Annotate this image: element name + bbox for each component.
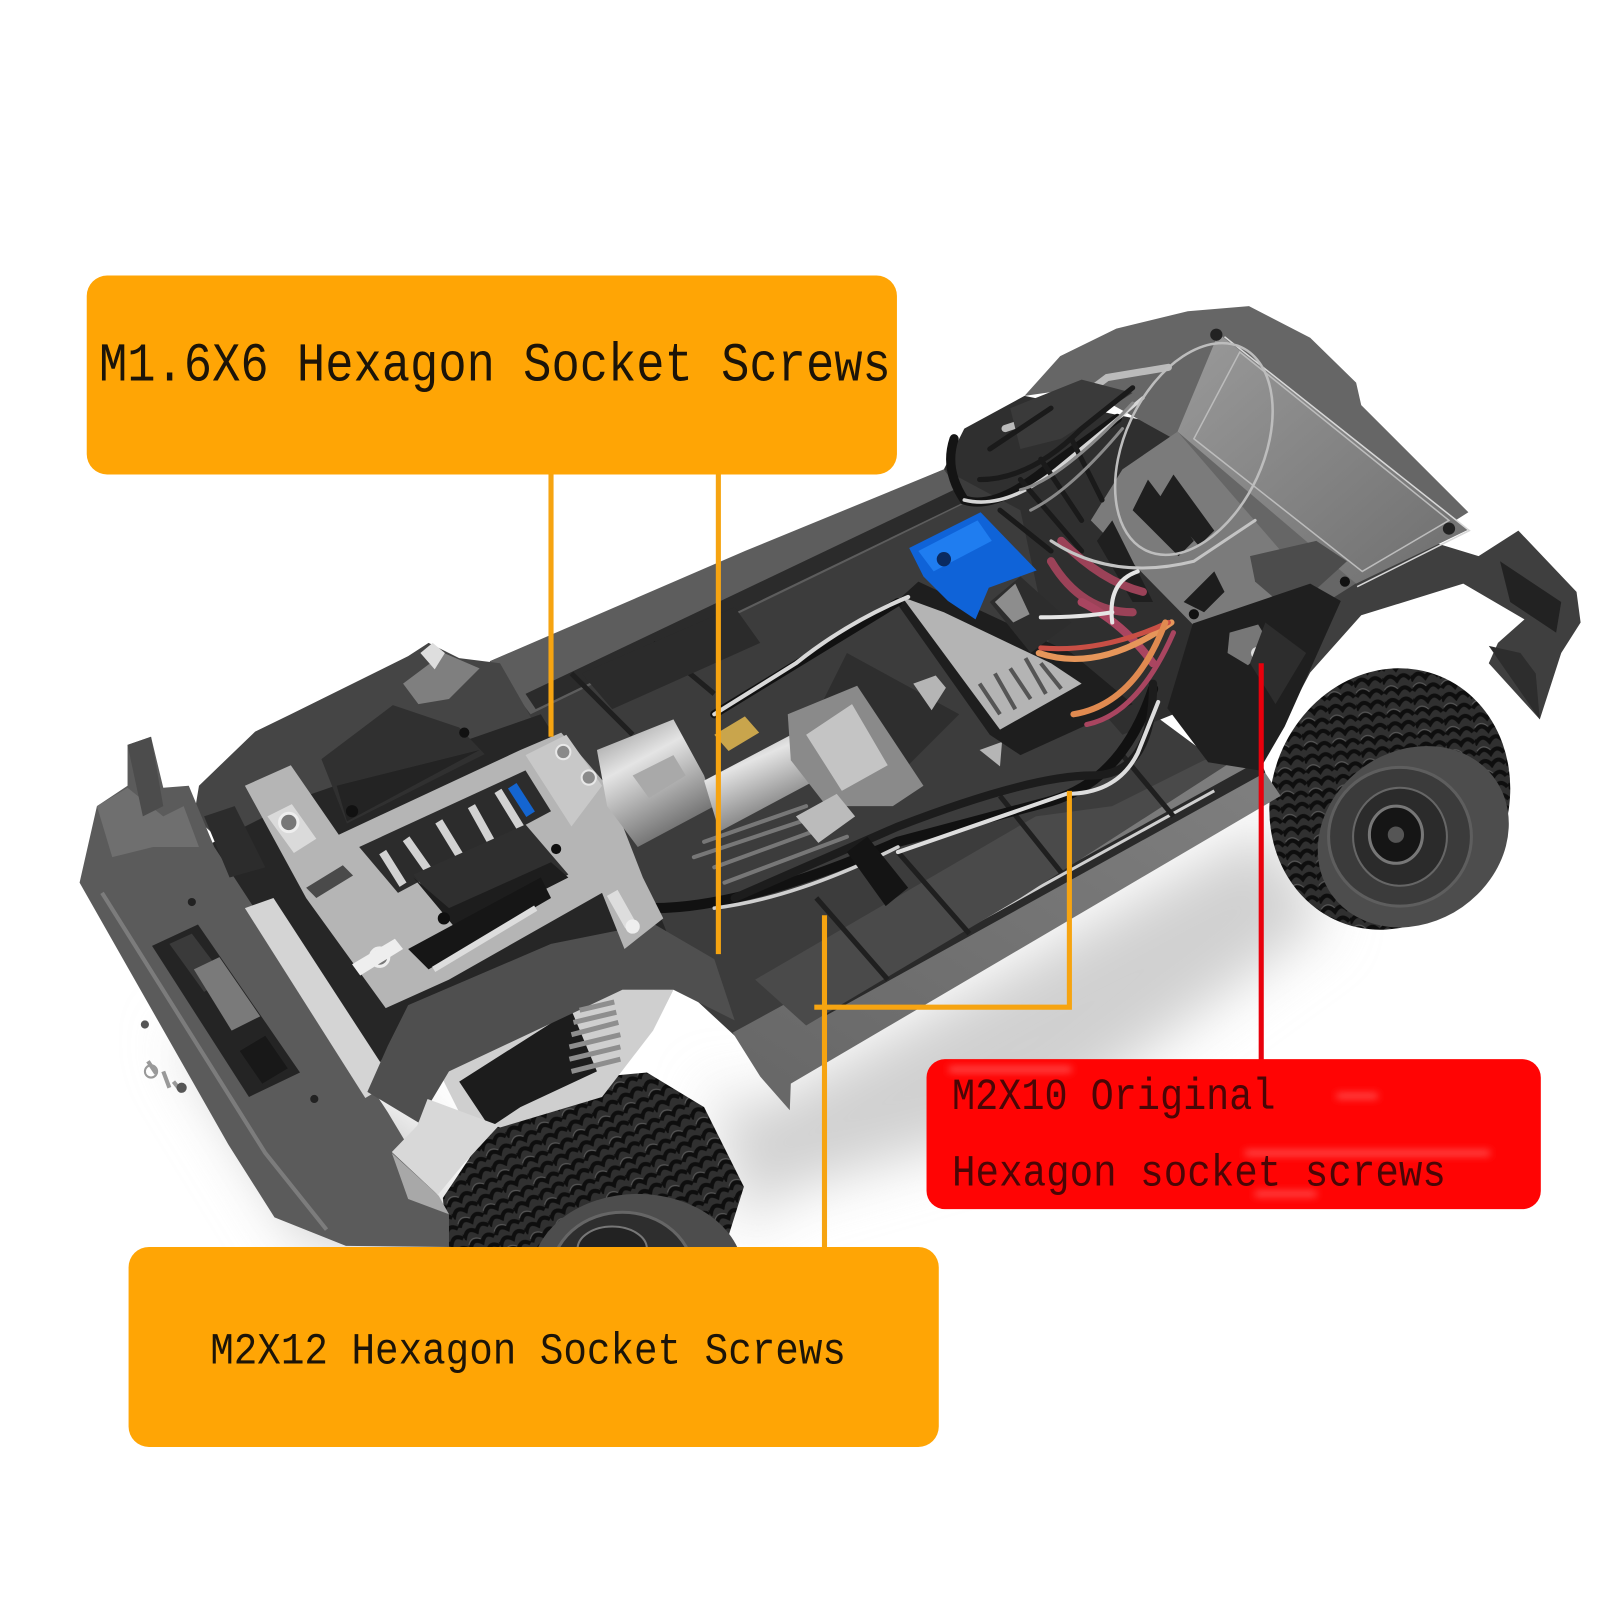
lower servo — [408, 824, 568, 969]
dark interior fill under rear body — [944, 396, 1204, 735]
electronic speed controller — [896, 582, 1133, 755]
upper side rail — [490, 469, 967, 714]
orange L-shaped leader line — [814, 791, 1069, 1007]
winch — [141, 924, 300, 1097]
rear dark shock tower — [1167, 584, 1341, 770]
front fender arch — [367, 923, 735, 1122]
main wire harness — [653, 597, 1158, 908]
blue receiver clip — [909, 512, 1071, 653]
callout: M2X12 screws: M2X12 Hexagon Socket Screws — [210, 1327, 846, 1377]
rear wheel — [1230, 632, 1549, 966]
wiring loom behind rear roof — [951, 318, 1304, 663]
front underbody behind fender — [439, 990, 673, 1128]
callout: M1.6X6 screws — [87, 276, 897, 474]
front coil spring — [569, 1002, 620, 1071]
silver front crossmember — [245, 733, 663, 1008]
front hood cover — [194, 643, 541, 918]
silver bumper strip — [204, 806, 393, 1098]
ground shadow — [173, 827, 1327, 1255]
orange leader line to lower callout — [822, 915, 827, 1247]
slotted battery tray — [1091, 432, 1350, 624]
callout: M2X10 original screws: M2X10 Original — [952, 1073, 1276, 1123]
callout: M2X12 screws — [129, 1247, 939, 1447]
front wheel — [443, 1072, 744, 1357]
chassis floor — [490, 469, 1281, 1110]
floor panels — [755, 750, 1250, 1026]
lower side step — [733, 750, 1281, 1110]
red leader line — [1259, 663, 1264, 1061]
coloured motor wires — [1039, 571, 1173, 724]
orange leader line to centre-left screw — [716, 474, 721, 954]
gearbox and transmission — [526, 686, 923, 934]
callout: M2X10 original screws — [927, 1059, 1541, 1209]
callout: M2X10 original screws: Hexagon socket screws — [952, 1150, 1446, 1200]
louvred centre grille — [359, 770, 551, 893]
rear fender — [1235, 531, 1581, 749]
silver underbody plate — [392, 1099, 499, 1214]
callout: M1.6X6 screws: M1.6X6 Hexagon Socket Screws — [99, 335, 891, 398]
rear roof cover — [1024, 306, 1469, 602]
dark engine bay fill — [204, 714, 673, 1097]
front bumper — [80, 737, 449, 1247]
upper servo — [321, 705, 485, 823]
orange leader line to upper-left screw — [549, 474, 554, 737]
